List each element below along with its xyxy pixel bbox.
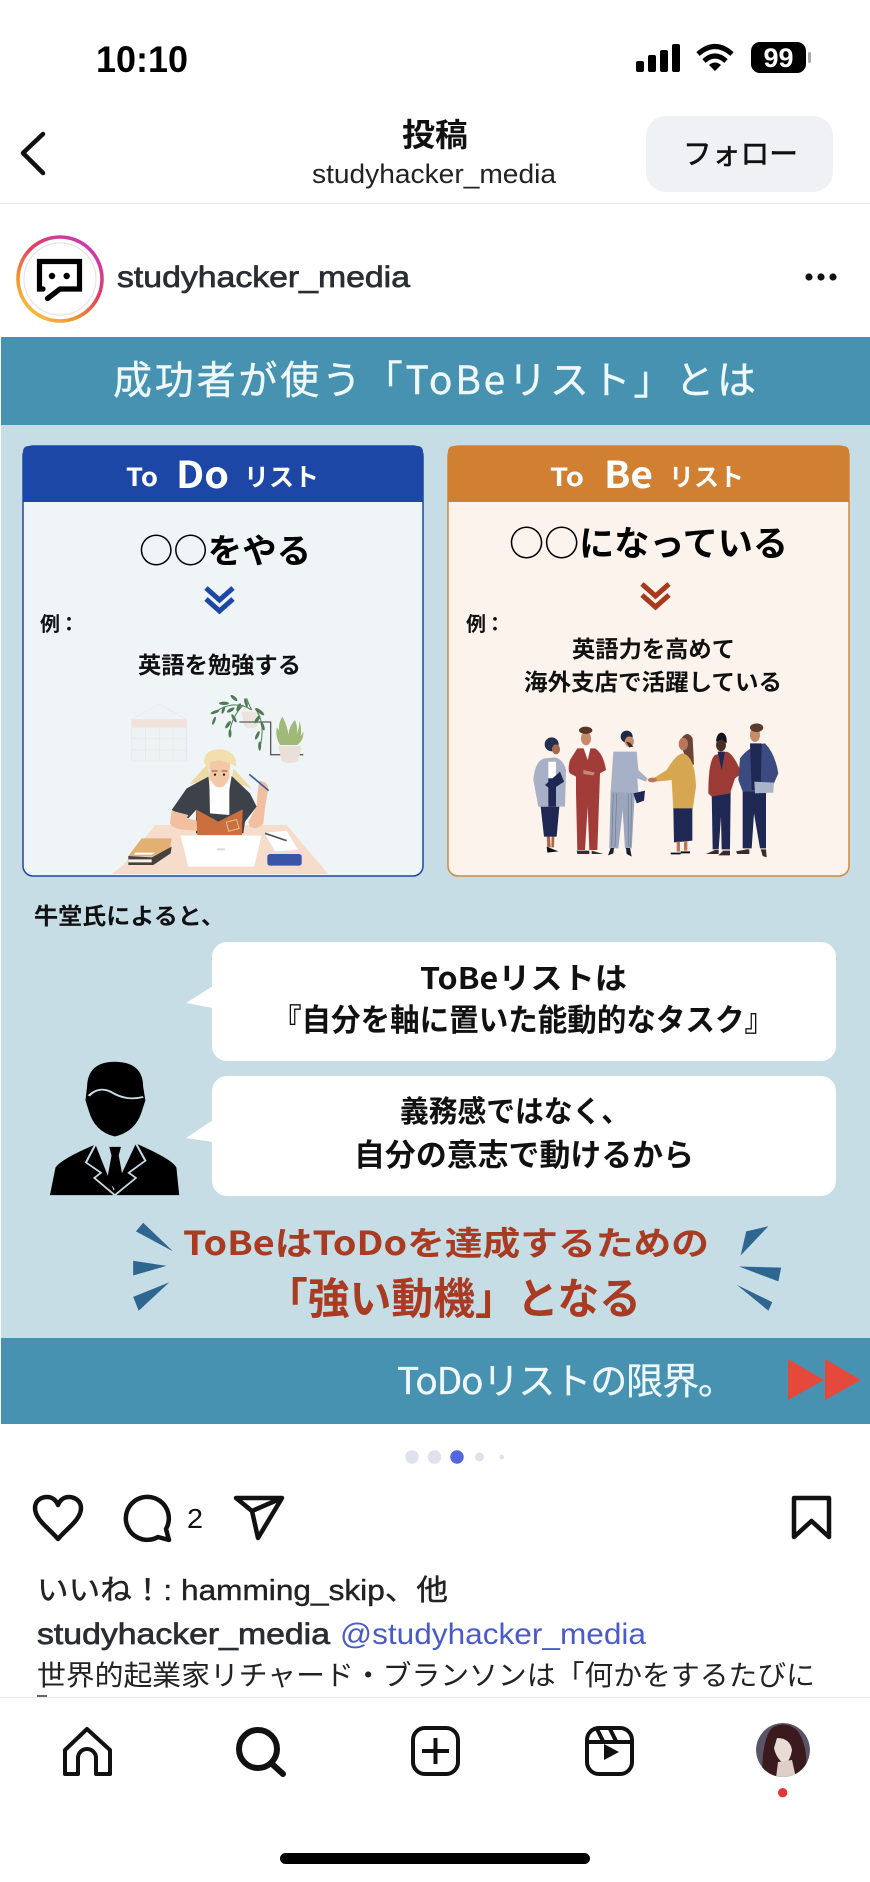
icon: businessman silhouette [50, 1062, 179, 1195]
icon: account avatar [18, 237, 102, 321]
intro text: 牛堂氏によると、 [34, 897, 225, 931]
caption account name: studyhacker_media [37, 1618, 330, 1651]
speech bubble 1 [186, 942, 836, 1061]
panel header: To Be: To [550, 458, 584, 494]
speech bubble 2 [186, 1076, 836, 1196]
panel header: To Do: To [126, 458, 158, 494]
icon: more dots [805, 273, 837, 281]
illustration: group of business people [533, 723, 778, 857]
header account name: studyhacker_media [312, 159, 557, 189]
panel header: To Be [448, 445, 849, 502]
title banner: 成功者が使う「ToBeリスト」とは [113, 350, 756, 406]
person 4 [648, 734, 696, 854]
panel header: To Do: Do [176, 445, 229, 499]
example label: 例： [40, 608, 79, 637]
icon: wifi [698, 46, 732, 71]
icon: emphasis sparks [133, 1223, 781, 1311]
caption body: 世界的起業家リチャード・ブランソンは「何かをするたびに [37, 1660, 815, 1691]
speech bubble 2: 義務感ではなく、 [400, 1087, 630, 1131]
notification dot [778, 1788, 787, 1797]
conclusion text: ToBeはToDoを達成するための [183, 1217, 709, 1265]
person 1 [533, 737, 566, 853]
icon: cellular signal [636, 44, 680, 72]
icon: new post [413, 1728, 458, 1774]
clock: 10:10 [96, 39, 188, 80]
example label: 例： [466, 608, 505, 637]
icon: home [65, 1729, 110, 1774]
footer banner [1, 1338, 870, 1424]
icon: search [239, 1730, 283, 1774]
example text: 海外支店で活躍している [524, 663, 782, 697]
caption mention link: @studyhacker_media [340, 1618, 646, 1651]
panel header: To Do: リスト [244, 458, 319, 494]
bottom navigation [65, 1723, 810, 1797]
follow button [646, 116, 833, 192]
conclusion text: 「強い動機」となる [266, 1265, 641, 1327]
panel: To Do list [23, 445, 423, 876]
icon: battery 99: 99 [763, 43, 794, 73]
icon: double chevron blue [206, 588, 233, 611]
person 3 [608, 731, 647, 857]
follow button: フォロー [683, 139, 798, 171]
status bar [96, 39, 811, 80]
header title: 投稿 [402, 117, 468, 153]
title banner [1, 337, 870, 425]
panel header: To Do [23, 445, 423, 502]
panel: To Be list [448, 445, 849, 876]
navigation header [23, 116, 833, 192]
heading: do something: ○○をやる [139, 524, 311, 573]
icon: battery 99 [751, 42, 811, 73]
icon: heart [35, 1497, 81, 1539]
icon: profile avatar [756, 1723, 810, 1778]
likes line: いいね！: hamming_skip、他 [37, 1574, 448, 1607]
person 6 [736, 723, 778, 857]
speech bubble 1: 『自分を軸に置いた能動的なタスク』 [272, 995, 774, 1040]
post account row [18, 237, 837, 321]
home indicator [280, 1853, 590, 1864]
post image background [1, 425, 870, 1338]
speech bubble 1: ToBeリストは [420, 954, 627, 998]
icon: back chevron [23, 134, 43, 173]
icon: reels [587, 1728, 632, 1774]
icon: bookmark [794, 1498, 829, 1537]
caption [37, 1618, 815, 1697]
speech bubble 2: 自分の意志で動けるから [354, 1130, 694, 1175]
action icons [35, 1497, 829, 1540]
example text: 英語を勉強する [138, 646, 301, 680]
icon: double chevron red [642, 584, 669, 607]
person 2 [569, 727, 606, 854]
icon: comment [126, 1497, 169, 1540]
icon: share [236, 1498, 282, 1538]
person 5 [706, 733, 742, 855]
account name: studyhacker_media [117, 261, 410, 294]
illustration: person studying at desk [112, 694, 328, 874]
comment count: 2 [187, 1503, 203, 1534]
carousel dots [405, 1450, 504, 1464]
conclusion text [183, 1217, 709, 1327]
heading: becoming something: ○○になっている [509, 516, 788, 567]
icon: next arrows [788, 1359, 861, 1400]
example text: 英語力を高めて [572, 630, 735, 664]
example text [524, 630, 782, 697]
panel header: To Be: Be [604, 445, 653, 499]
panel header: To Be: リスト [669, 458, 744, 494]
footer banner: ToDoリストの限界。 [397, 1351, 735, 1405]
